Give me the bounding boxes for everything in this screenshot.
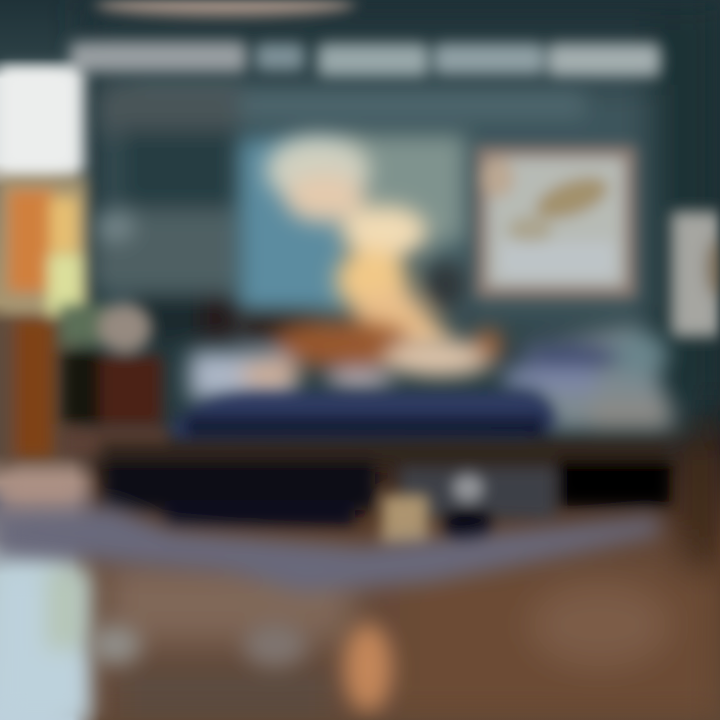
under-bed objects [382, 474, 492, 547]
title (illegible in the reference, drawn as blurred light bands) [70, 42, 660, 76]
bed: navy duvet [170, 392, 556, 444]
bed: pillows and pale linen [190, 318, 675, 430]
floor reflection: warm lamp glow [344, 624, 392, 712]
window-like wall panel on the left [95, 85, 240, 345]
floor reflection: pale patches [89, 623, 307, 667]
rug: grey-lavender [0, 505, 660, 592]
bed frame: dark base [100, 442, 670, 526]
background: teal wall [80, 0, 720, 440]
plant and side table [60, 304, 170, 458]
wall art: pale flame shape [266, 136, 467, 360]
rug end: peach strip at left [0, 472, 85, 506]
floor reflection: window light [0, 570, 90, 720]
small framed picture at right [672, 212, 720, 336]
ceiling lamp [95, 0, 355, 15]
wall panel: blue and pale green [240, 135, 465, 310]
subtitle (illegible in the reference, drawn as a blurred band) [135, 92, 585, 118]
background: wooden floor [80, 440, 720, 720]
framed picture on the wall [476, 146, 636, 298]
floor lamp: warm glow and wooden stand [0, 178, 86, 468]
window glow [0, 68, 80, 172]
